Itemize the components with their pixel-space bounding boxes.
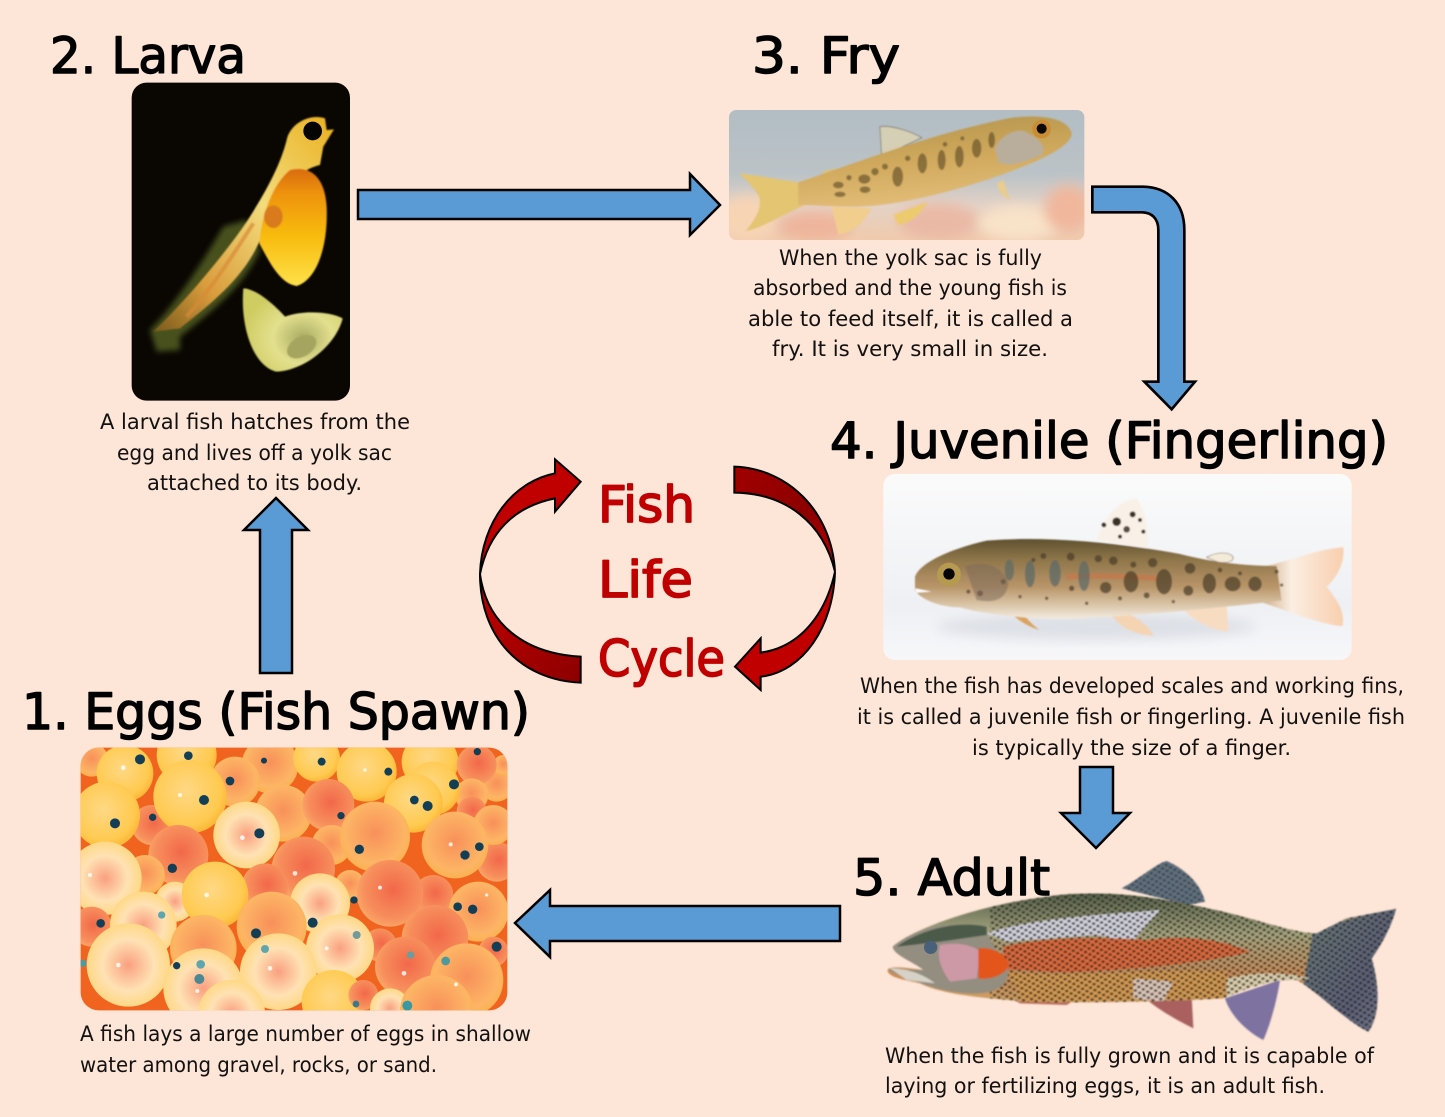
arrow: bottom left band [480,574,581,683]
panel: juvenile stage [830,412,1405,760]
heading: 1. Eggs (Fish Spawn): 1. Eggs (Fish Spawn) [22,683,530,741]
caption: eggs [80,1022,531,1077]
photo: fry [729,110,1084,240]
caption: adult [885,1044,1375,1098]
caption: larva: A larval fish hatches from the [100,410,410,434]
caption: adult: When the fish is fully grown and it is capable of [885,1044,1375,1068]
caption: fry [748,246,1073,361]
title: Fish: Fish [598,476,695,534]
panel: eggs stage [22,683,531,1077]
arrow: adult to eggs [515,890,840,957]
centre: fish life cycle [480,459,835,690]
heading: 3. Fry: 3. Fry [752,27,900,85]
fish eye [937,563,961,587]
arrow: fry to juvenile [1092,187,1195,409]
caption: adult: laying or fertilizing eggs, it is an adult fish. [885,1074,1325,1098]
fish eye [1032,120,1051,138]
title: Life: Life [598,551,693,609]
caption: fry: When the yolk sac is fully [779,246,1042,270]
fish eye [924,941,937,954]
caption: juvenile: When the fish has developed scales and working fins, [860,674,1404,698]
photo: fish eggs [80,748,508,1010]
photo: larval fish [130,80,355,405]
photo: juvenile fish [880,470,1355,665]
arrow: top right band [734,467,835,572]
arrow: bottom right [735,572,835,690]
caption: larva [100,410,410,495]
heading: 2. Larva: 2. Larva [50,27,246,85]
red cycle arrows [480,459,835,690]
heading: 5. Adult: 5. Adult [853,849,1050,907]
caption: juvenile: is typically the size of a finger. [972,736,1291,760]
caption: eggs: water among gravel, rocks, or sand. [80,1053,437,1077]
title: Cycle: Cycle [598,630,725,688]
arrow: top left [480,459,581,574]
heading: 4. Juvenile (Fingerling): 4. Juvenile (Fingerling) [830,412,1388,470]
caption: fry: able to feed itself, it is called a [748,307,1073,331]
caption: larva: attached to its body. [147,471,362,495]
photo: adult trout [887,861,1400,1042]
caption: juvenile: it is called a juvenile fish or fingerling. A juvenile fish [857,705,1405,729]
panel: adult stage [853,849,1400,1098]
caption: eggs: A fish lays a large number of eggs in shallow [80,1022,531,1046]
caption: larva: egg and lives off a yolk sac [117,441,392,465]
caption: fry: fry. It is very small in size. [772,337,1048,361]
panel: larva stage [50,27,410,495]
caption: fry: absorbed and the young fish is [753,276,1067,300]
arrow: juvenile to adult [1061,767,1130,848]
arrow: larva to fry [358,174,720,235]
panel: fry stage [718,27,1092,361]
caption: juvenile [857,674,1405,760]
arrow: egg to larva [244,498,308,673]
